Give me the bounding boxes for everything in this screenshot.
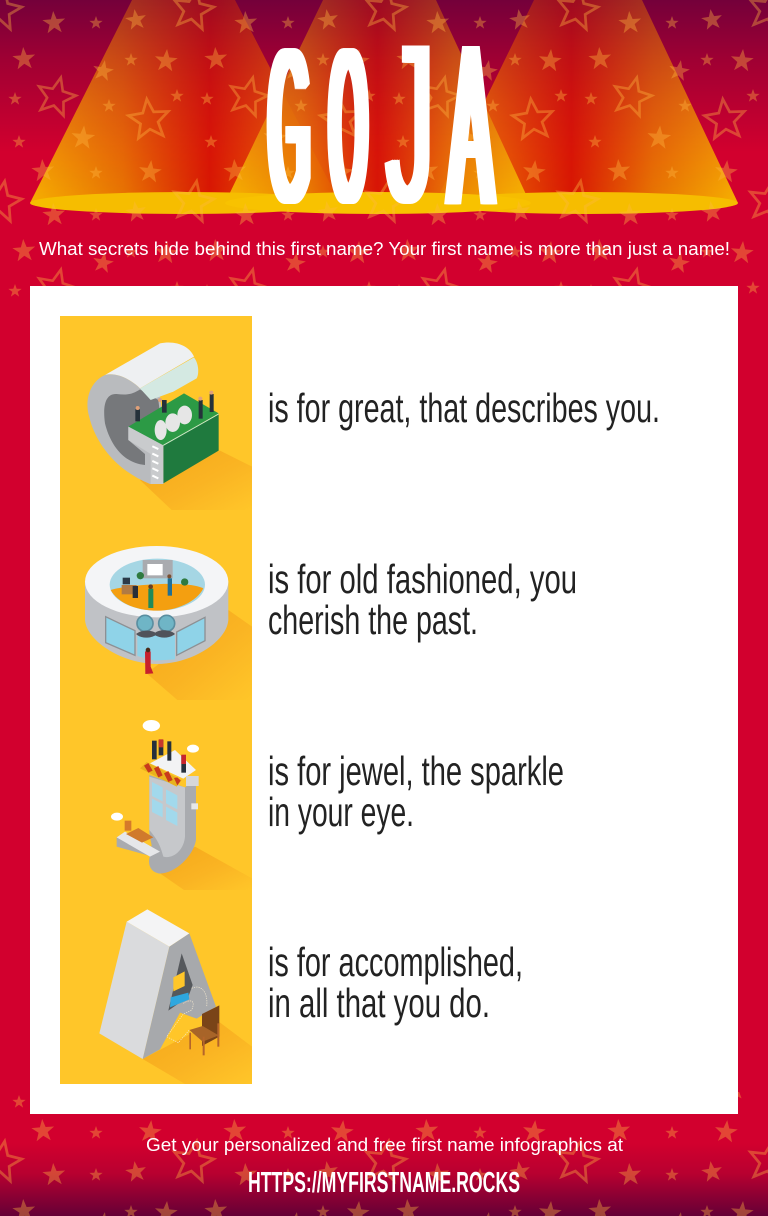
icon: letter O optician building <box>84 546 252 700</box>
lines: O <box>268 556 577 643</box>
lines: A <box>268 939 523 1026</box>
title: J <box>383 0 430 251</box>
icon: letter G building <box>87 342 252 510</box>
icon: letter A building <box>99 909 252 1084</box>
lines: A: is for accomplished, <box>268 939 523 985</box>
lines: O: is for old fashioned, you <box>268 556 577 602</box>
panel: yellow illustration column <box>60 316 252 1084</box>
footer line: Get your personalized and free first name infographics at <box>146 1135 623 1155</box>
star pattern top <box>0 0 768 300</box>
lines: J: in your eye. <box>268 789 414 835</box>
lines: J: is for jewel, the sparkle <box>268 748 564 794</box>
subtitle: What secrets hide behind this first name? Your first name is more than just a name! <box>39 239 730 259</box>
title: O <box>325 4 361 250</box>
star pattern bottom <box>0 1092 768 1216</box>
lines: A: in all that you do. <box>268 980 490 1026</box>
title: A <box>444 0 487 254</box>
title: G <box>264 4 305 250</box>
panel: white content card <box>30 286 738 1114</box>
footer text <box>146 1135 623 1199</box>
icon: letter J building <box>111 720 246 890</box>
footer url: HTTPS://MYFIRSTNAME.ROCKS <box>248 1167 520 1199</box>
lines: J <box>268 748 564 835</box>
spotlights <box>30 0 738 214</box>
lines: O: cherish the past. <box>268 597 478 643</box>
title <box>264 0 498 254</box>
